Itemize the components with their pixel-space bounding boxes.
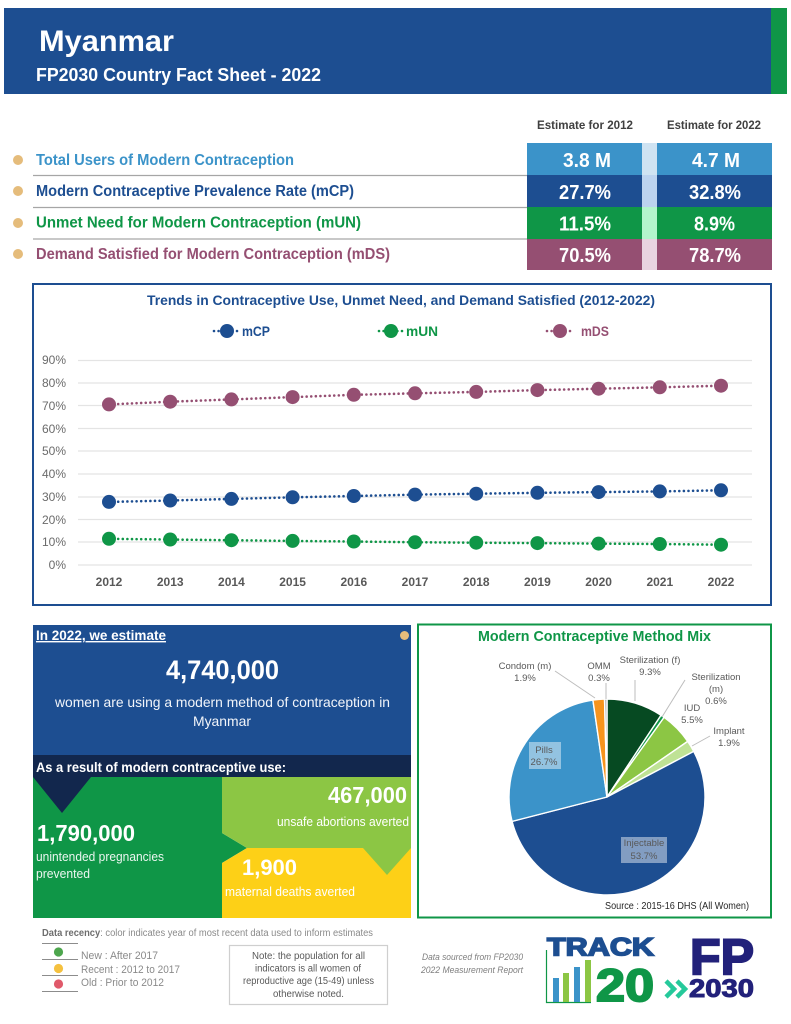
pie labels: Condom (m) (499, 661, 551, 672)
block: maternal deaths averted: maternal deaths averted (225, 884, 355, 899)
pie labels: Injectable (624, 838, 664, 849)
row: mCP (13, 175, 772, 207)
row: mUN (13, 207, 772, 239)
x axis labels (96, 575, 735, 589)
data recency legend (42, 928, 373, 992)
row: mUN: 11.5% (559, 214, 611, 236)
users number: 4,740,000 (166, 655, 279, 685)
population note box: Note: the population for all (252, 951, 365, 962)
block: unsafe abortions averted: unsafe abortions averted (277, 814, 409, 829)
row: mUN: Unmet Need for Modern Contraception (mUN) (36, 214, 361, 232)
pie labels: 53.7% (631, 851, 658, 862)
block: maternal deaths averted (222, 848, 411, 918)
y axis labels: 0% (49, 558, 66, 572)
x axis labels: 2018 (463, 575, 490, 589)
x axis labels: 2016 (340, 575, 367, 589)
x axis labels: 2014 (218, 575, 245, 589)
y axis labels: 50% (42, 444, 66, 458)
title: Myanmar (39, 25, 174, 58)
logo: FP2030 (666, 929, 754, 1003)
x axis labels: 2012 (96, 575, 123, 589)
subtitle: FP2030 Country Fact Sheet - 2022 (36, 65, 321, 85)
header banner (4, 8, 787, 94)
data source note (420, 952, 524, 976)
users description: Myanmar (193, 713, 251, 729)
pie labels: Sterilization (691, 672, 741, 683)
row: total users: 3.8 M (563, 150, 611, 172)
panel: 2022 estimate and impact (33, 625, 411, 918)
logo: Track20 (546, 934, 654, 1011)
column headings: Estimate for 2022 (667, 118, 761, 132)
row: total users: Total Users of Modern Contraception (36, 152, 294, 169)
data recency legend: Old : Prior to 2012 (81, 977, 164, 989)
pie labels: (m) (709, 684, 723, 695)
pie labels: Implant (713, 726, 745, 737)
block: pregnancies prevented: unintended pregnancies (36, 849, 164, 864)
data recency legend: New : After 2017 (81, 950, 158, 962)
block: unsafe abortions averted: 467,000 (328, 782, 407, 808)
data source note: 2022 Measurement Report (420, 965, 523, 976)
pie labels: Pills (535, 745, 553, 756)
panel: method mix pie chart (418, 624, 771, 918)
pie labels: Sterilization (f) (620, 655, 680, 666)
y axis labels: 20% (42, 513, 66, 527)
pie labels: 9.3% (639, 667, 661, 678)
row: total users (13, 143, 772, 175)
pie labels: 1.9% (718, 738, 740, 749)
y axis labels (42, 353, 66, 572)
row: mUN: 8.9% (694, 214, 735, 236)
users description (54, 694, 390, 729)
logo: Track20: TRACK (547, 934, 654, 962)
row: mDS: 70.5% (559, 245, 611, 267)
logo: FP2030: 2030 (689, 975, 754, 1003)
logo: Track20: 20 (596, 960, 654, 1011)
recency dot (400, 631, 409, 640)
pie labels: 5.5% (681, 715, 703, 726)
logo: FP2030: FP (690, 929, 754, 985)
chart legend: mUN (406, 323, 438, 339)
row: mCP: Modern Contraceptive Prevalence Rate (mCP) (36, 183, 354, 200)
y axis labels: 30% (42, 490, 66, 504)
chart legend: mCP (242, 323, 270, 339)
row: mDS (13, 239, 772, 270)
panel: trends line chart (33, 284, 771, 605)
users description: women are using a modern method of contraception in (54, 694, 390, 710)
y axis labels: 60% (42, 422, 66, 436)
row: mDS: 78.7% (689, 245, 741, 267)
data source note: Data sourced from FP2030 (422, 952, 524, 963)
estimate heading: In 2022, we estimate (36, 627, 166, 643)
block: maternal deaths averted: 1,900 (242, 855, 297, 880)
series: mDS (102, 379, 728, 411)
row: mCP: 27.7% (559, 182, 611, 204)
leader lines (555, 671, 710, 746)
pie title: Modern Contraceptive Method Mix (478, 628, 712, 645)
row: mCP: 32.8% (689, 182, 741, 204)
pie source: Source : 2015-16 DHS (All Women) (605, 901, 749, 912)
summary indicator table (13, 118, 772, 270)
x axis labels: 2015 (279, 575, 306, 589)
population note box (230, 946, 388, 1004)
pie labels: 1.9% (514, 673, 536, 684)
row: mDS: Demand Satisfied for Modern Contraception (mDS) (36, 246, 390, 263)
population note box: indicators is all women of (255, 964, 361, 974)
y axis labels: 90% (42, 353, 66, 367)
x axis labels: 2019 (524, 575, 551, 589)
series: mCP (102, 483, 728, 509)
x axis labels: 2013 (157, 575, 184, 589)
population note box: reproductive age (15-49) unless (243, 976, 374, 987)
pie labels: 0.3% (588, 673, 610, 684)
pie labels (499, 655, 745, 863)
y axis labels: 10% (42, 535, 66, 549)
pie slices (509, 699, 705, 895)
pie labels: 0.6% (705, 696, 727, 707)
series: mUN (102, 532, 728, 552)
data recency legend: Recent : 2012 to 2017 (81, 964, 180, 976)
x axis labels: 2017 (402, 575, 429, 589)
chart title: Trends in Contraceptive Use, Unmet Need, and Demand Satisfied (2012-2022) (147, 292, 655, 308)
block: pregnancies prevented: prevented (36, 866, 90, 881)
result band (33, 755, 411, 777)
pie labels: 26.7% (531, 757, 558, 768)
column headings (537, 118, 761, 132)
data recency legend: Data recency: color indicates year of most recent data used to inform estimates (42, 928, 373, 939)
block: pregnancies prevented (33, 777, 247, 918)
chart legend (214, 323, 609, 339)
pie labels: OMM (587, 661, 611, 672)
block: pregnancies prevented: 1,790,000 (37, 820, 135, 846)
chart legend: mDS (581, 323, 609, 339)
pie labels: IUD (684, 703, 700, 714)
x axis labels: 2021 (646, 575, 673, 589)
x axis labels: 2020 (585, 575, 612, 589)
y axis labels: 80% (42, 376, 66, 390)
panel: 2022 estimate and impact: As a result of modern contraceptive use: (36, 759, 286, 775)
y axis labels: 40% (42, 467, 66, 481)
column headings: Estimate for 2012 (537, 118, 633, 132)
population note box: otherwise noted. (273, 989, 344, 1000)
block: unsafe abortions averted (222, 777, 411, 875)
x axis labels: 2022 (708, 575, 735, 589)
row: total users: 4.7 M (692, 150, 740, 172)
y axis labels: 70% (42, 399, 66, 413)
